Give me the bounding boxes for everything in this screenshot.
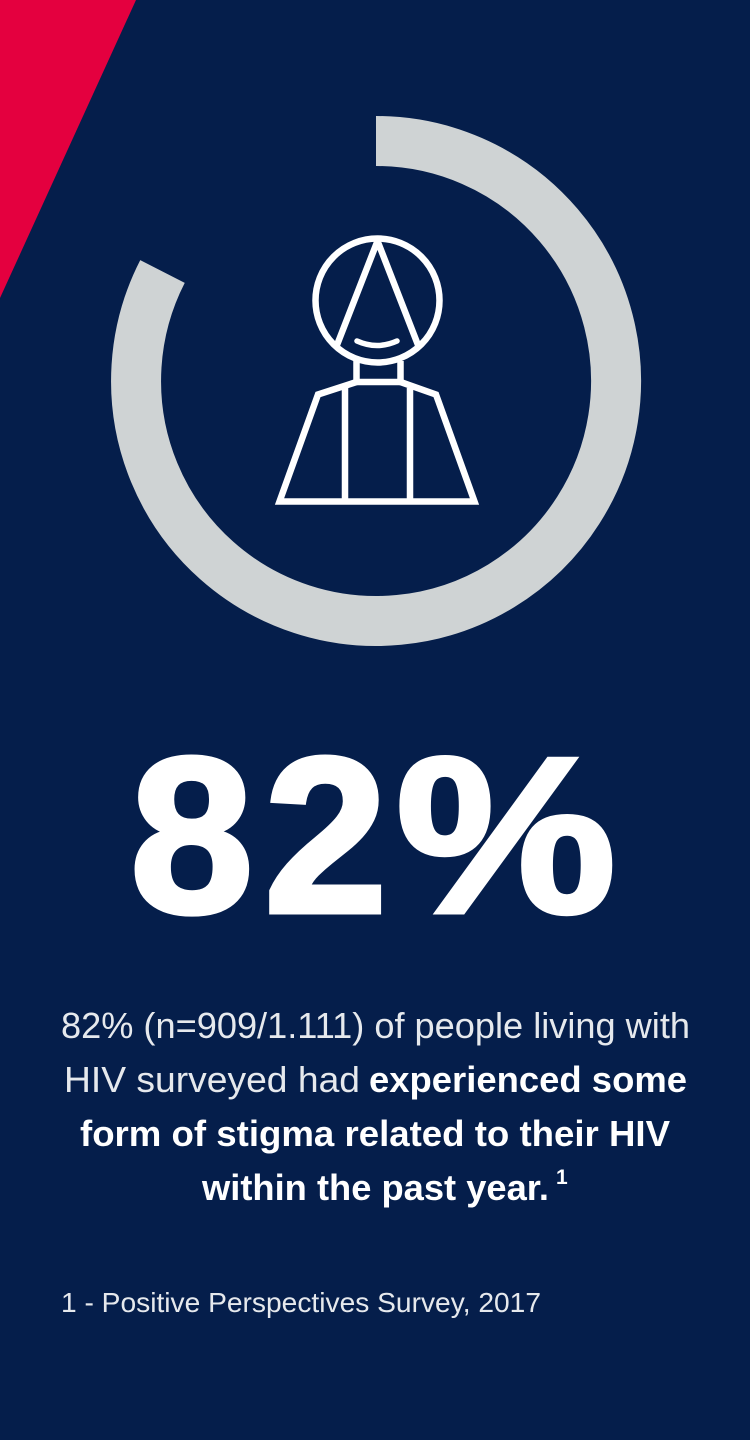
icon head <box>316 238 440 362</box>
footnote: 1 - Positive Perspectives Survey, 2017 <box>61 1287 541 1318</box>
percent sign: % <box>396 712 616 960</box>
icon: person <box>280 238 474 502</box>
line 3: form of stigma related to their HIV <box>80 1113 670 1154</box>
digit 2: 2 <box>264 712 387 960</box>
line 2 regular: HIV surveyed had <box>64 1059 360 1100</box>
description text <box>61 1005 690 1208</box>
big statistic <box>130 712 616 960</box>
red corner triangle <box>0 0 136 298</box>
donut progress ring: 82% <box>136 141 616 621</box>
digit 8: 8 <box>130 712 253 960</box>
icon smile <box>357 341 397 346</box>
line 2 bold: experienced some <box>369 1059 687 1100</box>
icon arm lines <box>345 388 410 502</box>
line 1: 82% (n=909/1.111) of people living with <box>61 1005 690 1046</box>
superscript reference: 1 <box>556 1166 568 1189</box>
icon hair <box>337 241 418 345</box>
icon torso <box>280 382 474 502</box>
icon neck <box>356 361 400 382</box>
line 4: within the past year. <box>201 1167 549 1208</box>
